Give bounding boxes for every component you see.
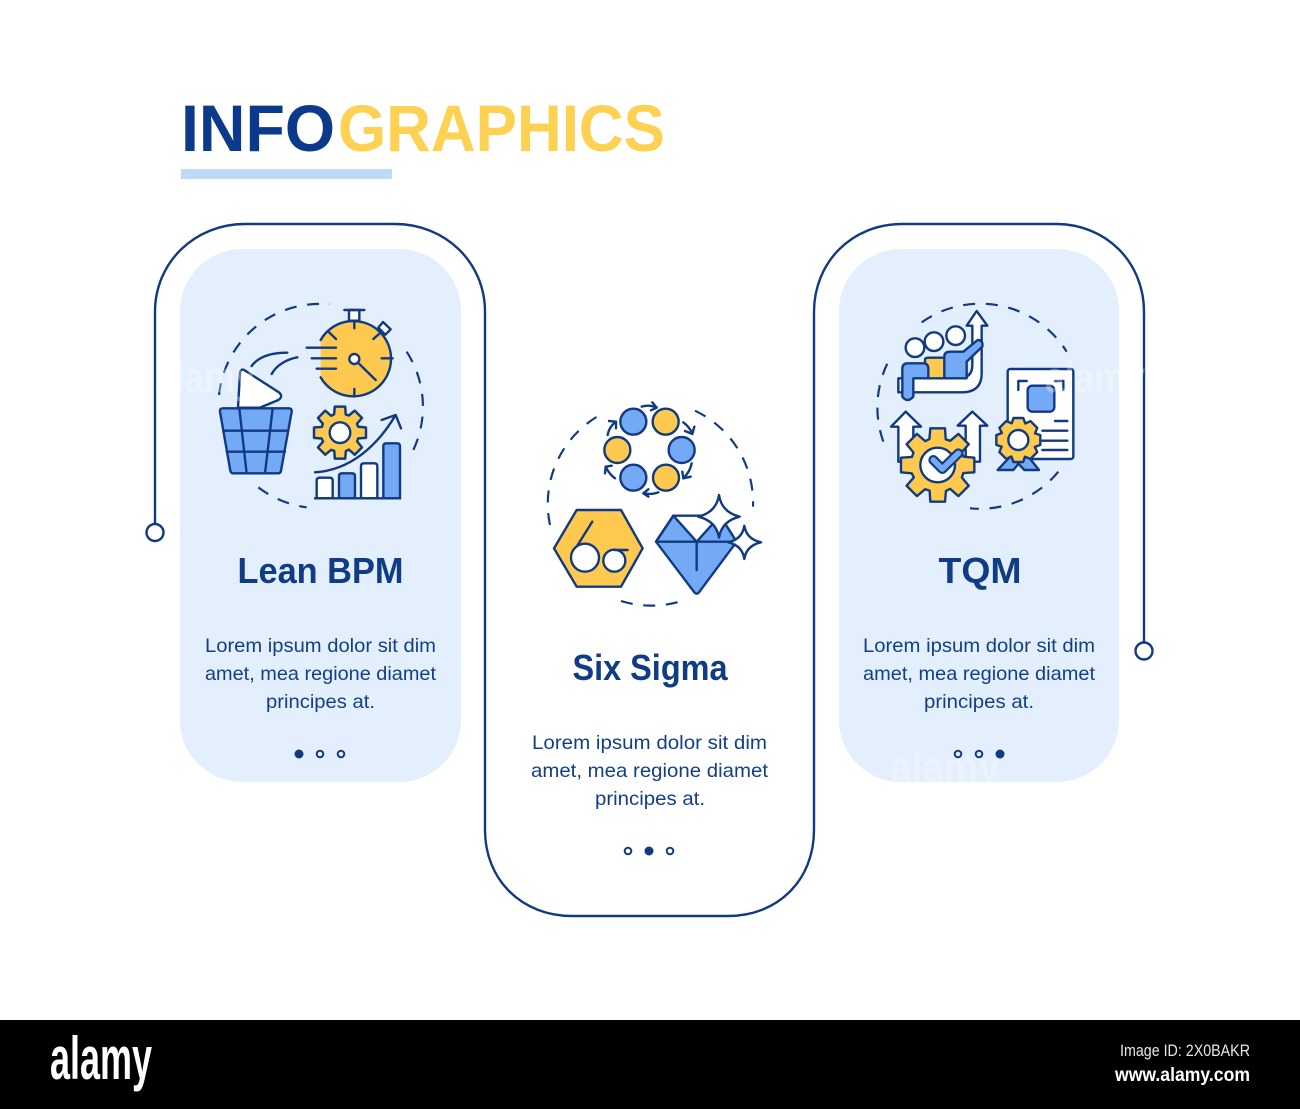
title underline xyxy=(181,169,392,179)
upward arrow right xyxy=(958,412,987,462)
body text: middle: principes at. xyxy=(595,788,705,810)
heading: Six Sigma: Six Sigma xyxy=(572,647,728,688)
pagination dots: middle xyxy=(625,848,673,854)
heading: Lean BPM: Lean BPM xyxy=(238,550,404,591)
paper in bin xyxy=(238,370,281,408)
watermark traces: alamy xyxy=(890,743,1000,792)
bar chart with growth arrow xyxy=(315,415,401,498)
body text: right: principes at. xyxy=(924,691,1034,713)
outline end marker xyxy=(1136,642,1152,660)
watermark traces: alamy xyxy=(155,353,255,402)
body text: left: amet, mea regione diamet xyxy=(205,663,437,685)
body text: middle: amet, mea regione diamet xyxy=(531,760,769,782)
certificate xyxy=(996,369,1073,470)
icon: Lean BPM xyxy=(219,304,423,507)
sparkles xyxy=(698,495,761,559)
gear xyxy=(314,407,366,459)
six sigma hexagon xyxy=(554,510,643,587)
outline start marker xyxy=(146,524,164,541)
bin xyxy=(220,408,292,473)
icon: Six Sigma xyxy=(548,402,761,606)
body text: left xyxy=(205,635,437,713)
process cycle xyxy=(604,402,695,497)
body text: middle: Lorem ipsum dolor sit dim xyxy=(532,732,767,754)
panel: left background xyxy=(180,249,461,782)
watermark traces xyxy=(155,353,1145,792)
panel: right background xyxy=(839,249,1119,782)
heading: TQM: TQM xyxy=(938,550,1022,591)
icon: TQM xyxy=(877,304,1073,509)
pagination dots: right xyxy=(955,750,1004,758)
stopwatch xyxy=(307,310,393,397)
footer bar xyxy=(0,1020,1300,1109)
body text: right xyxy=(863,635,1096,713)
footer url: www.alamy.com xyxy=(1114,1065,1250,1086)
title xyxy=(181,91,665,165)
body text: right: amet, mea regione diamet xyxy=(863,663,1096,685)
body text: middle xyxy=(531,732,769,810)
watermark traces: alamy xyxy=(1045,353,1145,402)
footer logo: alamy: alamy xyxy=(50,1025,152,1092)
connecting outline xyxy=(155,224,1144,916)
title word: INFO: INFO xyxy=(181,91,335,165)
footer image id: Image ID: 2X0BAKR xyxy=(1120,1041,1250,1060)
body text: right: Lorem ipsum dolor sit dim xyxy=(863,635,1095,657)
diamond xyxy=(656,516,737,594)
team on growth arrow xyxy=(898,311,987,400)
title word: GRAPHICS: GRAPHICS xyxy=(338,91,665,165)
upward arrow left xyxy=(891,412,921,462)
quality gear with check xyxy=(901,428,974,502)
pagination dots: left xyxy=(296,750,344,758)
body text: left: Lorem ipsum dolor sit dim xyxy=(205,635,436,657)
body text: left: principes at. xyxy=(266,691,375,713)
motion curves xyxy=(252,353,297,374)
